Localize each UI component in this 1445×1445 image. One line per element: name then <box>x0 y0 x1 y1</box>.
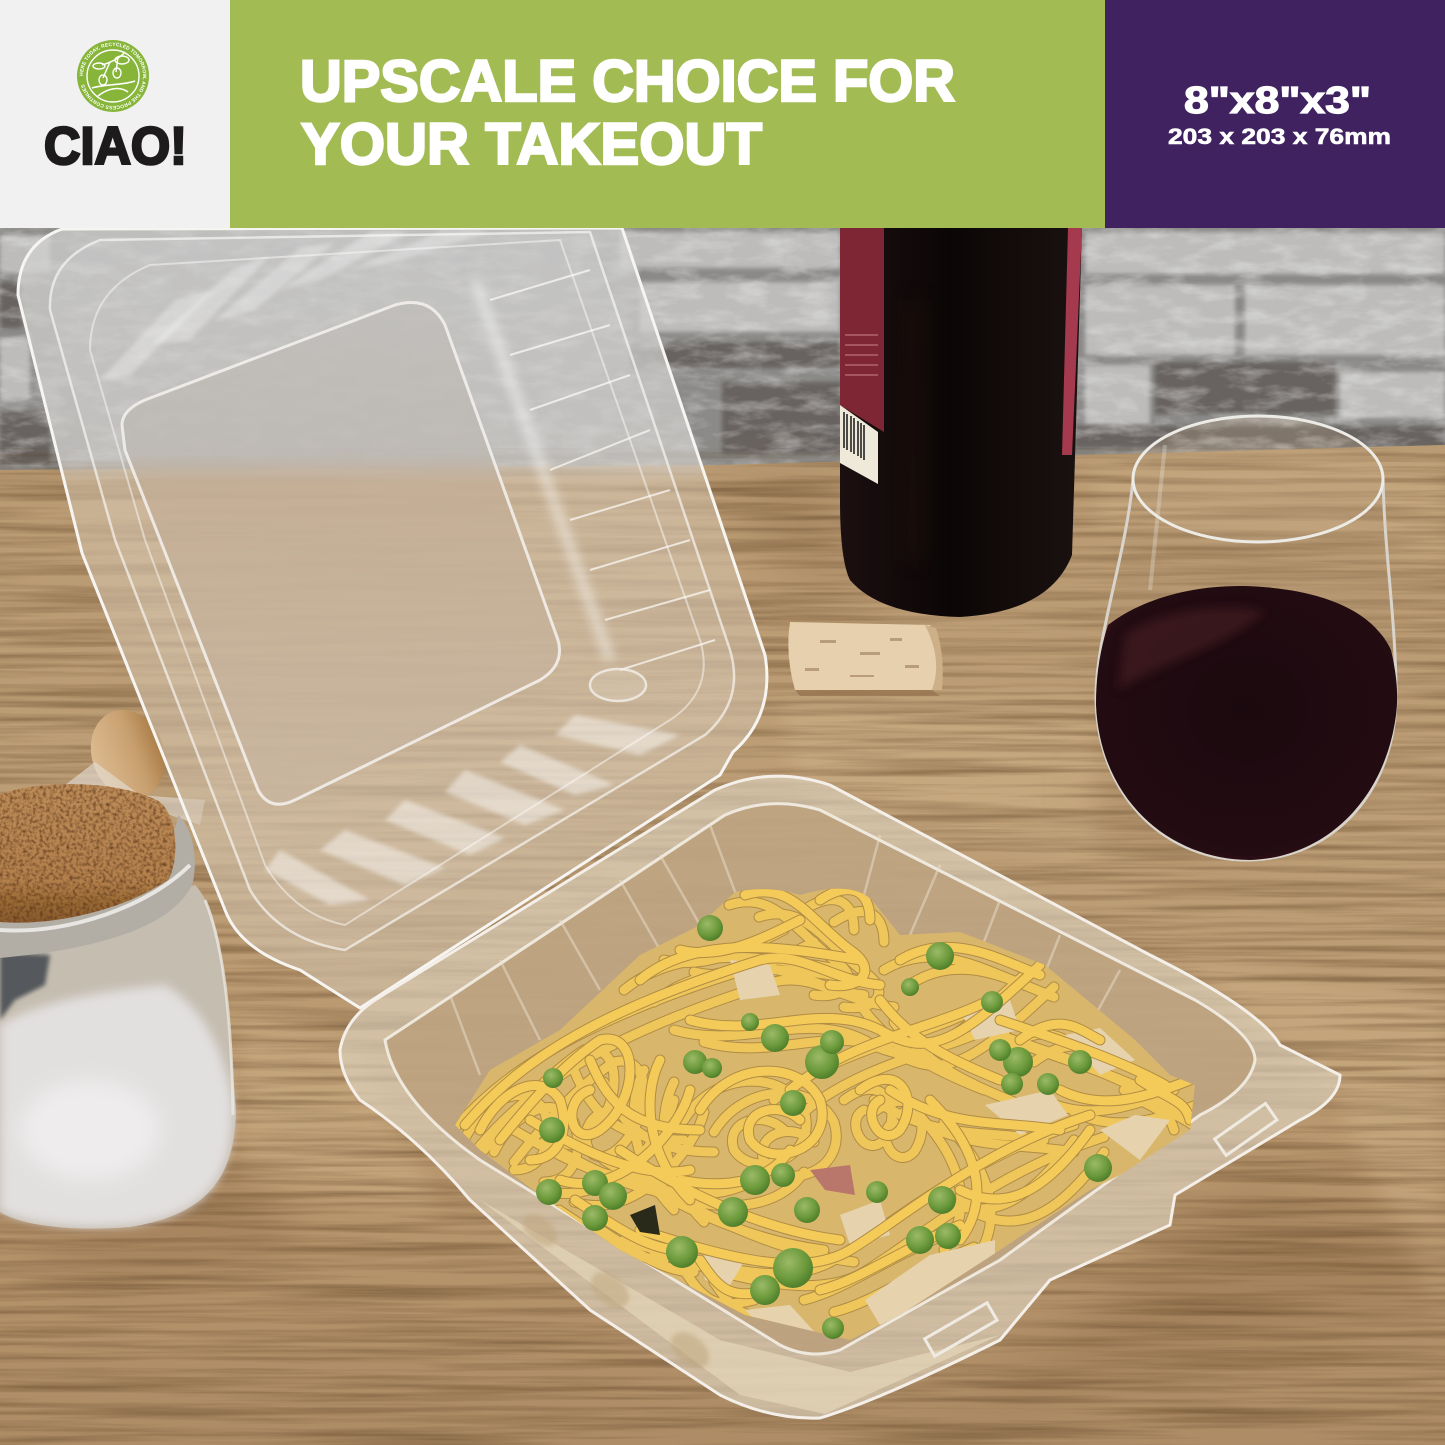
glass jar body <box>0 885 236 1229</box>
header: logo panel <box>0 0 230 228</box>
header: title panel <box>230 0 1105 228</box>
jar neck <box>0 815 195 958</box>
title <box>300 49 955 177</box>
logo wordmark: CIAO! <box>44 117 187 176</box>
wine glass <box>1096 416 1397 860</box>
red wine <box>1096 586 1397 860</box>
clamshell lid (open) <box>18 228 767 1008</box>
bottle label <box>840 228 1082 484</box>
lid ribs, top-left <box>100 232 490 380</box>
lid rim lines <box>50 232 734 950</box>
dimensions in millimetres: 203 x 203 x 76mm <box>1168 124 1391 149</box>
wine bottle <box>840 228 1082 617</box>
cork lid <box>0 784 175 923</box>
title: UPSCALE CHOICE FOR <box>300 49 955 114</box>
cork stopper <box>788 622 943 696</box>
clamshell base <box>340 776 1340 1418</box>
salt jar with cork lid <box>0 699 236 1229</box>
title: YOUR TAKEOUT <box>301 112 762 177</box>
lid ribs, right <box>475 280 610 660</box>
header: dimensions panel <box>1105 0 1445 228</box>
chicken pieces <box>700 960 1170 1338</box>
pasta with peas <box>440 880 1210 1350</box>
logo: green olive badge: HERE TODAY, RECYCLED TOMORROW, AND THE PROCESS CONTINUES <box>79 42 146 110</box>
lid bright ribs, bottom <box>265 715 680 905</box>
peas <box>536 915 1112 1339</box>
background: brick wall <box>0 228 1445 473</box>
wooden table <box>0 445 1445 1445</box>
lid inner flat panel <box>122 302 560 804</box>
wooden spoon knob <box>79 699 177 809</box>
salt <box>0 985 232 1227</box>
dimensions in inches: 8"x8"x3" <box>1184 80 1371 122</box>
